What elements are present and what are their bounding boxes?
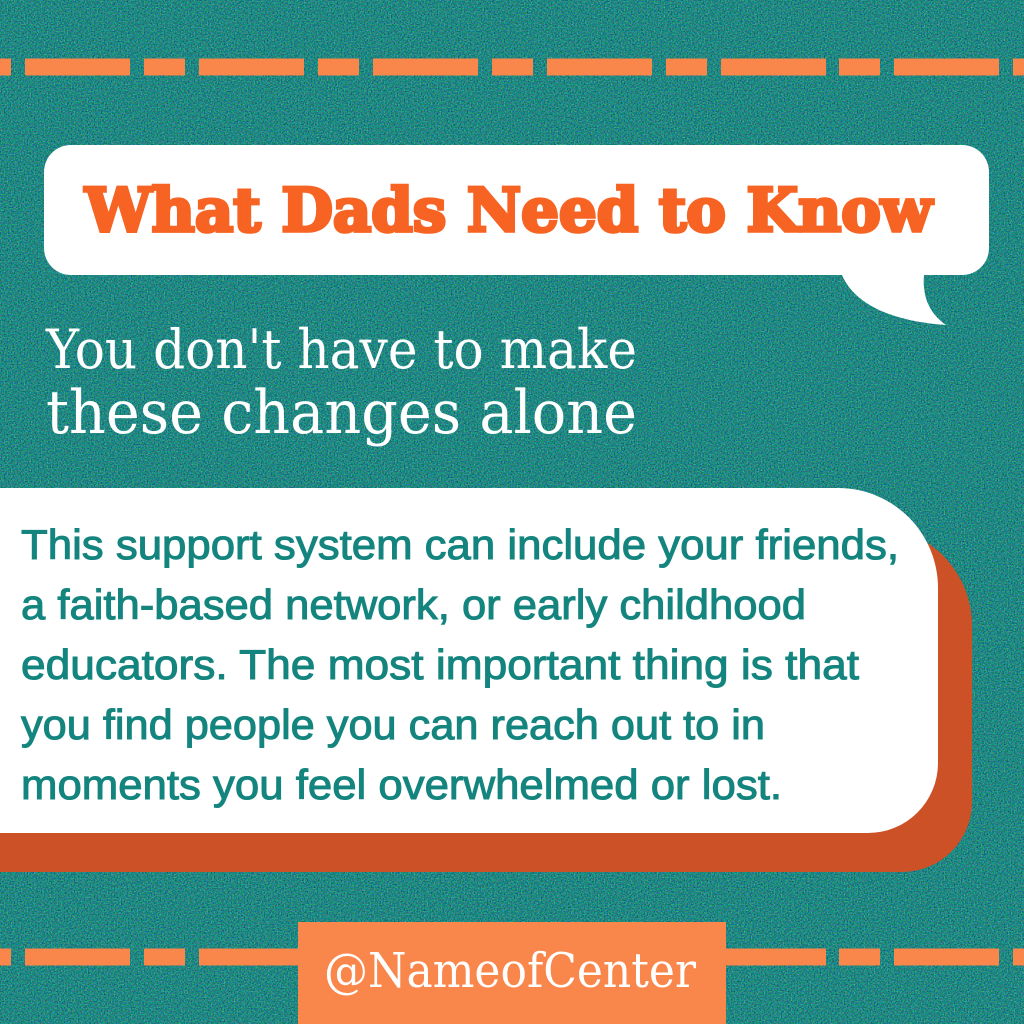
top dashed stitch line (0, 58, 1024, 76)
subtitle (45, 318, 637, 448)
body text: you find people you can reach out to in (21, 701, 765, 748)
subtitle: You don't have to make (45, 318, 637, 381)
panel shadow (0, 526, 972, 872)
body text: educators. The most important thing is that (21, 641, 859, 688)
body text: moments you feel overwhelmed or lost. (21, 761, 782, 808)
title: What Dads Need to Know (84, 176, 933, 246)
bottom dashed stitch line (0, 948, 1024, 966)
panel: support system message (0, 488, 972, 872)
body text: a faith-based network, or early childhood (21, 581, 806, 628)
speech bubble shape (44, 145, 989, 325)
body text: This support system can include your friends, (21, 521, 899, 568)
handle tag: @NameofCenter (324, 943, 696, 999)
panel background (0, 488, 938, 833)
speech bubble with title (44, 145, 989, 325)
handle tag (298, 922, 726, 1024)
body text (21, 521, 899, 808)
subtitle: these changes alone (46, 378, 637, 448)
